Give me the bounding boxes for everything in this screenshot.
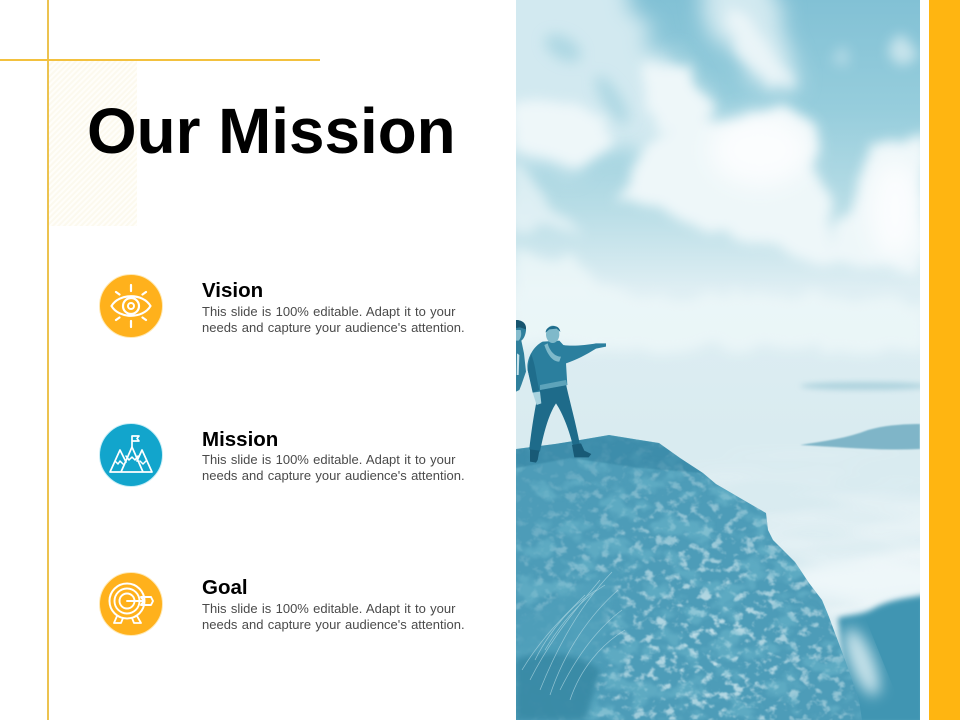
icon: target with arrow <box>99 572 163 636</box>
icon: eye <box>99 274 163 338</box>
right accent bar <box>929 0 960 720</box>
hikers <box>516 320 606 463</box>
hiker at the photo edge <box>516 320 526 392</box>
icon: mountains with flag <box>99 423 163 487</box>
item: Mission <box>99 423 465 487</box>
text: Vision description <box>202 304 465 335</box>
cloud wisp over water <box>837 624 887 700</box>
text: Goal description <box>202 601 465 632</box>
heading: Mission: Mission <box>202 428 278 451</box>
title: Our Mission <box>87 95 456 167</box>
text: Mission description <box>202 452 465 483</box>
pointing hiker <box>527 326 606 463</box>
photo: hikers on a mountain cliff above clouds <box>516 0 920 720</box>
text: Goal description: needs and capture your audience's attention. <box>202 617 465 632</box>
sky background <box>516 0 920 720</box>
clouds <box>490 0 925 350</box>
text: Vision description: This slide is 100% editable. Adapt it to your <box>202 304 455 319</box>
item: Vision <box>99 274 465 338</box>
rocky cliff <box>516 430 866 720</box>
heading: Vision: Vision <box>202 279 263 302</box>
text: Mission description: This slide is 100% editable. Adapt it to your <box>202 452 455 467</box>
dark water below clouds <box>838 595 925 720</box>
text: Mission description: needs and capture your audience's attention. <box>202 468 465 483</box>
grass tuft <box>516 565 620 720</box>
distant haze cloud <box>800 382 930 390</box>
item: Goal <box>99 572 465 636</box>
heading: Goal: Goal <box>202 576 248 599</box>
distant island <box>800 424 920 450</box>
lower cloud sea <box>780 500 920 618</box>
text: Vision description: needs and capture your audience's attention. <box>202 320 465 335</box>
text: Goal description: This slide is 100% editable. Adapt it to your <box>202 601 455 616</box>
